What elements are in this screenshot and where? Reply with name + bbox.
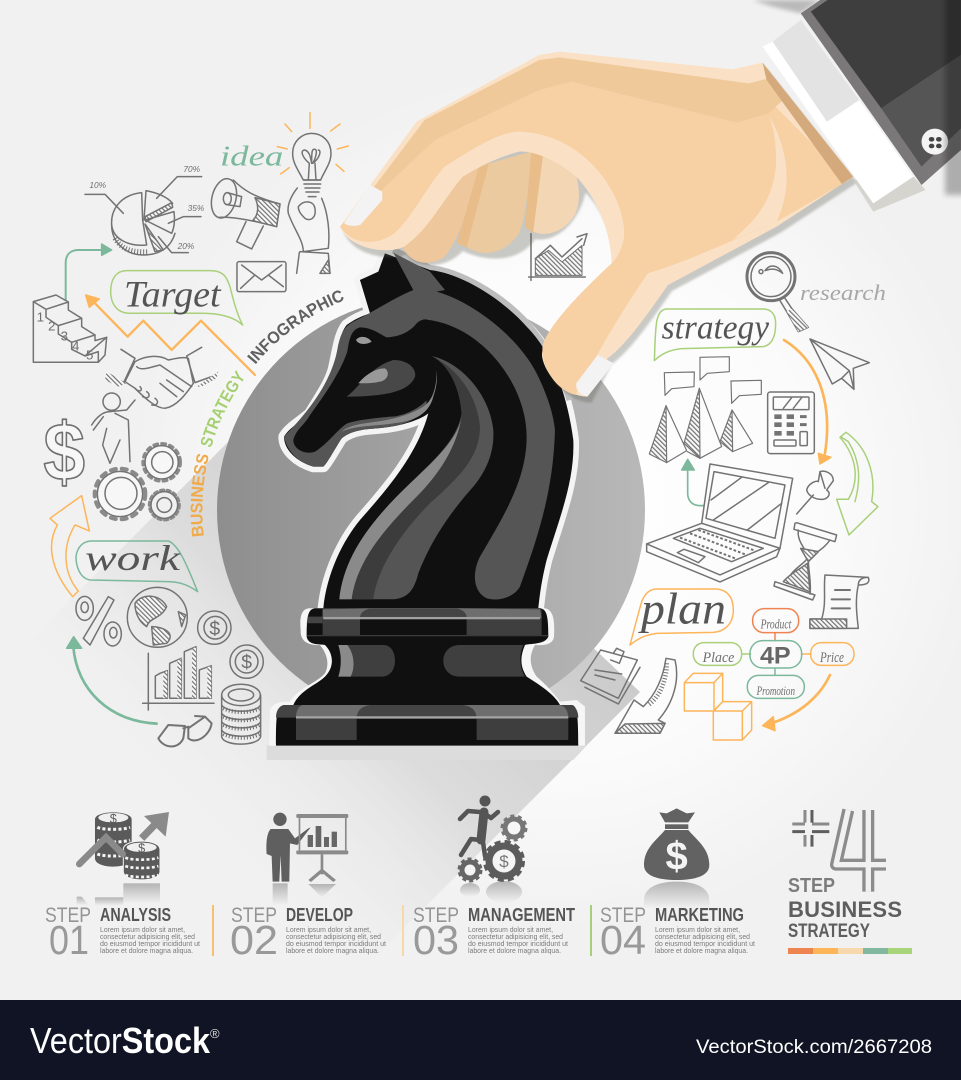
orange zigzag arrow xyxy=(86,295,255,375)
icon: running figure xyxy=(92,393,135,463)
badge STRATEGY: STRATEGY xyxy=(788,921,870,942)
board bars xyxy=(308,826,337,847)
speech bubble: target xyxy=(111,271,243,325)
footer logo: VectorStock xyxy=(30,1020,211,1061)
step 03 label: STEP xyxy=(413,904,459,927)
icon: curved block arrow xyxy=(615,658,677,733)
4P diagram: 4P xyxy=(760,642,791,669)
footer url: VectorStock.com/2667208 xyxy=(696,1036,932,1058)
icon: push pin xyxy=(797,471,833,514)
icon: numbered stairs: 2 xyxy=(48,319,55,334)
neck pills xyxy=(338,645,525,677)
icon: coins and arrow xyxy=(77,812,169,906)
doodles: upper right cluster xyxy=(647,253,886,582)
sleeve lighter panel xyxy=(881,55,961,167)
step 03 description: labore et dolore magna aliqua. xyxy=(468,946,561,955)
front ear xyxy=(382,253,412,295)
numeral four outline xyxy=(836,810,886,892)
step 04 xyxy=(600,808,755,963)
step 02 xyxy=(230,813,386,963)
rising arrow xyxy=(79,837,123,864)
step 03 description: Lorem ipsum dolor sit amet, xyxy=(468,925,553,934)
icon: coins: $ xyxy=(241,653,252,674)
collar segments xyxy=(307,609,548,636)
jaw highlight xyxy=(342,370,437,432)
step 03 description: consectetur adipisicing elit, sed xyxy=(468,932,563,941)
right edge sleeve shadow xyxy=(945,0,961,195)
icon: money bag xyxy=(644,808,709,908)
eye xyxy=(356,337,372,344)
big dollar gear: $ xyxy=(499,852,509,871)
palm crescent xyxy=(732,115,787,240)
icon: coins xyxy=(198,611,263,678)
speech bubble: plan: plan xyxy=(638,584,726,633)
step 04 description: consectetur adipisicing elit, sed xyxy=(655,932,750,941)
speech bubble: strategy: strategy xyxy=(662,309,769,346)
divider 3 xyxy=(590,905,592,956)
handwritten word: research: research xyxy=(800,280,886,305)
4P diagram: Product xyxy=(760,616,792,631)
icon: calculator xyxy=(768,392,814,454)
knight white outline xyxy=(284,253,573,608)
icon: pyramids with speech bubbles xyxy=(649,357,761,463)
colour bar xyxy=(788,948,912,954)
step 04 description: do eiusmod tempor incididunt ut xyxy=(655,939,755,948)
badge BUSINESS: BUSINESS xyxy=(788,897,902,922)
footer registered mark: ® xyxy=(210,1026,220,1041)
wrist shadow xyxy=(763,63,853,184)
divider 2 xyxy=(402,905,404,956)
step 04 description: labore et dolore magna aliqua. xyxy=(655,946,748,955)
orange arrow below 4P xyxy=(763,675,830,731)
sleeve top shadow xyxy=(753,0,820,13)
hand soft shadow xyxy=(344,61,857,403)
step 04 number: 04 xyxy=(600,917,646,963)
icon: numbered stairs: 3 xyxy=(61,329,68,344)
pie chart xyxy=(85,164,205,255)
pie chart: 35% xyxy=(188,203,205,213)
small gear left xyxy=(459,859,481,881)
divider 1 xyxy=(212,905,214,956)
icon: dollar sign: $ xyxy=(43,407,85,498)
arrow head segment xyxy=(142,812,169,838)
icon: laptop xyxy=(647,464,793,582)
speech bubble: work: work xyxy=(85,538,181,578)
curved label: business strategy infographic: STRATEGY xyxy=(200,370,244,447)
small gear top xyxy=(502,816,526,840)
speech bubble: work xyxy=(76,538,198,592)
shadow below the knight xyxy=(267,746,587,760)
step 02 description: Lorem ipsum dolor sit amet, xyxy=(286,925,371,934)
step 01 number: 01 xyxy=(49,917,89,963)
back ear xyxy=(360,272,388,303)
cheek xyxy=(347,360,415,397)
mane side grey rim xyxy=(393,250,570,400)
sleeve edge xyxy=(801,0,961,185)
black face xyxy=(293,319,467,453)
base white outline xyxy=(269,608,585,746)
icon: numbered stairs xyxy=(33,295,107,362)
step 04 description xyxy=(655,925,755,955)
bag top xyxy=(659,808,695,822)
step 04 label: STEP xyxy=(600,904,646,927)
chess knight xyxy=(267,250,587,760)
base silhouette xyxy=(276,608,578,746)
plus sign xyxy=(792,810,829,847)
step 01 description xyxy=(100,925,200,955)
step 02 title: DEVELOP xyxy=(286,905,353,925)
handwritten word: idea: idea xyxy=(220,141,283,173)
step 01 description: consectetur adipisicing elit, sed xyxy=(100,932,195,941)
step 01 xyxy=(45,812,200,963)
doodles: lower right cluster xyxy=(581,523,869,740)
green block arrow xyxy=(837,432,878,535)
step 02 description: labore et dolore magna aliqua. xyxy=(286,946,379,955)
icon: light bulb held by hand xyxy=(288,133,331,273)
runner xyxy=(460,796,498,856)
step 02 number: 02 xyxy=(230,917,278,963)
curved label: business strategy infographic xyxy=(190,290,344,536)
hand top darker band xyxy=(374,57,787,193)
step 02 description: do eiusmod tempor incididunt ut xyxy=(286,939,386,948)
icon: presenter with chart board xyxy=(266,813,348,905)
dollar symbol: $ xyxy=(666,834,688,878)
hand light rim xyxy=(340,52,853,397)
icon: hourglass xyxy=(774,523,837,600)
icon: globe xyxy=(127,587,187,647)
neck stripe light grey xyxy=(339,417,462,599)
step 02 description: consectetur adipisicing elit, sed xyxy=(286,932,381,941)
hand main skin xyxy=(340,70,849,395)
icon: runner and gears xyxy=(459,796,526,903)
thumbnail xyxy=(576,355,614,397)
icon: numbered stairs: 4 xyxy=(72,339,80,354)
icon: glasses xyxy=(158,716,212,746)
knight body xyxy=(284,253,573,608)
step 01 description: labore et dolore magna aliqua. xyxy=(100,946,193,955)
folded fingers xyxy=(402,152,579,263)
step 03 description: do eiusmod tempor incididunt ut xyxy=(468,939,568,948)
cuff shadow xyxy=(853,177,926,212)
4P diagram: Place xyxy=(702,650,735,666)
reflection of gears xyxy=(460,881,522,903)
presentation board xyxy=(296,814,348,882)
presenter figure xyxy=(266,813,311,882)
icon: scroll xyxy=(810,575,869,628)
icon: percent xyxy=(76,596,121,646)
orange curved arrow xyxy=(784,340,831,464)
icon: sticky notes xyxy=(581,648,640,704)
icon: gears xyxy=(95,444,180,520)
icon: bar chart doodle xyxy=(143,647,214,710)
long diagonal shadow xyxy=(0,370,640,1060)
icon: megaphone xyxy=(207,176,280,249)
step 01 label: STEP xyxy=(45,904,91,927)
orange curved up arrow xyxy=(50,496,89,597)
step 03 description xyxy=(468,925,568,955)
neck stripe mid grey xyxy=(339,356,493,599)
icon: magnifier xyxy=(747,253,808,332)
icon: numbered stairs: 1 xyxy=(37,310,44,325)
icon: paper plane xyxy=(810,339,869,389)
idea rays xyxy=(277,113,348,174)
pie chart: 70% xyxy=(183,164,201,174)
step 03 number: 03 xyxy=(413,917,459,963)
doodle: small growth chart under the hand xyxy=(529,234,587,280)
curved label: business strategy infographic: INFOGRAPHIC xyxy=(247,290,344,364)
index fingernail xyxy=(344,185,382,226)
icon: numbered stairs: 5 xyxy=(86,347,93,362)
speech bubble: target: Target xyxy=(124,275,222,316)
neck stripe dark grey xyxy=(339,356,480,599)
step 02 label: STEP xyxy=(231,904,277,927)
step 04 description: Lorem ipsum dolor sit amet, xyxy=(655,925,740,934)
plus four step business strategy badge xyxy=(788,810,912,954)
step 02 description xyxy=(286,925,386,955)
grey circle xyxy=(217,296,645,724)
back coin stack: $ xyxy=(110,812,117,826)
icon: coin stack xyxy=(222,684,261,744)
reflection of coins xyxy=(77,883,160,906)
icon: coins: $ xyxy=(209,619,220,640)
sleeve button xyxy=(922,129,948,155)
step 04 title: MARKETING xyxy=(655,905,744,925)
speech bubble: strategy xyxy=(654,309,776,361)
front coin stack: $ xyxy=(138,842,145,856)
bag body xyxy=(644,830,709,880)
step 01 description: Lorem ipsum dolor sit amet, xyxy=(100,925,185,934)
curved label: business strategy infographic: BUSINESS xyxy=(190,454,208,536)
green arrow to pie chart xyxy=(66,244,112,300)
base plate segments xyxy=(276,705,578,740)
step 03 xyxy=(413,796,575,963)
cheek highlight xyxy=(358,368,388,383)
icon: handshake xyxy=(105,347,218,408)
bag neck xyxy=(665,824,688,829)
shirt cuff shaded xyxy=(773,20,859,122)
sleeve dark panel xyxy=(811,0,961,108)
badge STEP: STEP xyxy=(788,875,835,897)
reflection of presenter xyxy=(273,883,336,905)
grey head and mane band xyxy=(284,253,555,600)
icon: envelope xyxy=(237,262,286,292)
pie chart: 20% xyxy=(177,241,195,251)
hand and sleeve xyxy=(340,0,961,403)
green arrow up xyxy=(682,459,738,506)
step 03 title: MANAGEMENT xyxy=(468,905,575,925)
4P diagram: Promotion xyxy=(756,684,795,698)
step 01 description: do eiusmod tempor incididunt ut xyxy=(100,939,200,948)
reflection of money bag xyxy=(644,882,709,908)
4P diagram: Price xyxy=(819,650,844,666)
doodles: middle left cluster xyxy=(43,393,263,746)
green curved arrow xyxy=(67,637,157,724)
icon: wireframe cubes xyxy=(684,673,752,740)
speech bubble: plan xyxy=(630,584,733,645)
4P diagram xyxy=(693,609,854,698)
doodles: upper left cluster xyxy=(33,113,348,408)
shirt cuff xyxy=(763,42,913,203)
step 01 title: ANALYSIS xyxy=(100,905,171,925)
pie chart: 10% xyxy=(89,180,107,190)
footer bar xyxy=(0,1000,961,1080)
